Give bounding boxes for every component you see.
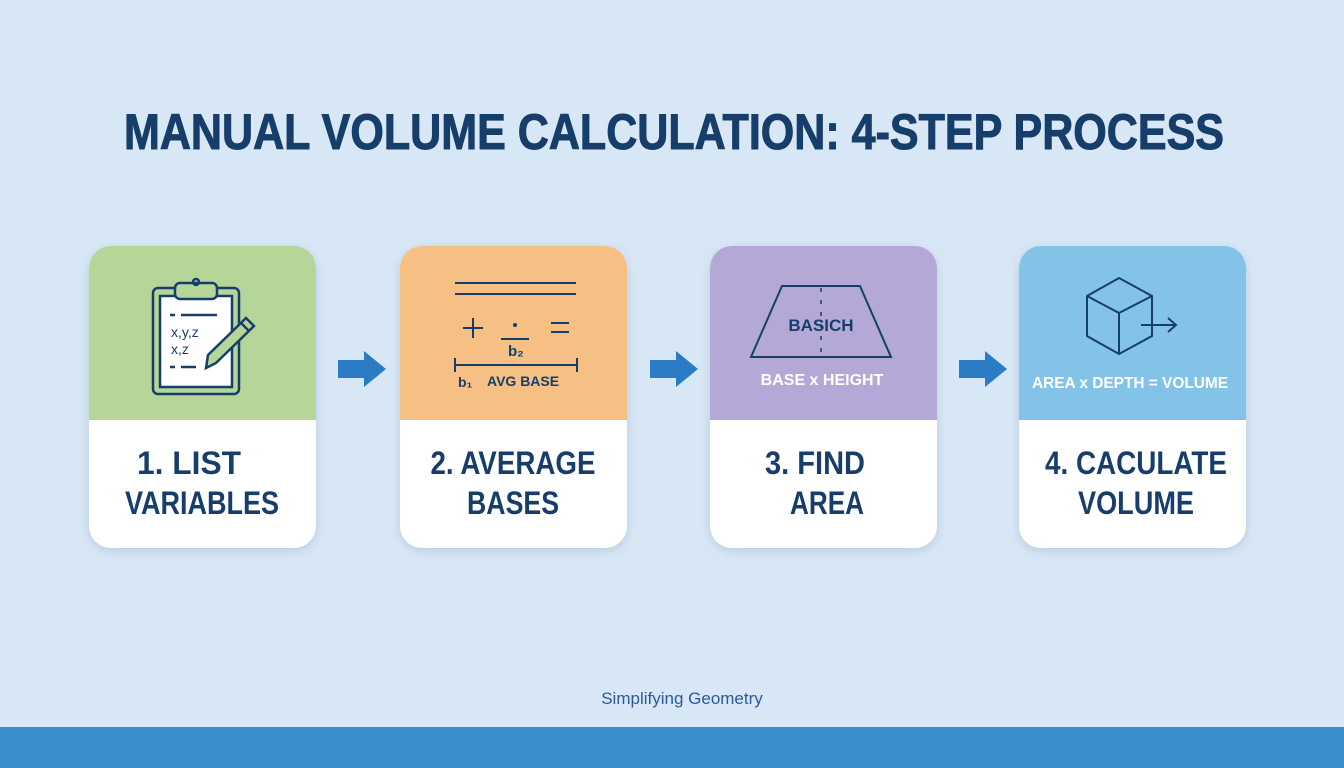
card 4: calculate volume: AREA x DEPTH = VOLUME bbox=[1032, 375, 1228, 392]
label 3: 3. FIND bbox=[765, 445, 865, 481]
card 2: average bases: b₁ bbox=[458, 374, 473, 390]
card 2: average bases bbox=[400, 246, 627, 548]
icon: trapezoid: BASICH bbox=[788, 316, 854, 335]
card 4: calculate volume bbox=[1019, 246, 1246, 548]
label 1: VARIABLES bbox=[125, 485, 279, 521]
label 4: VOLUME bbox=[1078, 485, 1194, 521]
footer bar bbox=[0, 727, 1344, 768]
card 2: average bases: b₂ bbox=[508, 343, 524, 360]
card 1: list variables: x,z bbox=[171, 341, 189, 357]
icon: trapezoid bbox=[751, 286, 891, 357]
label 2: BASES bbox=[467, 485, 559, 521]
icon: formula bbox=[455, 283, 577, 372]
label 3: AREA bbox=[790, 485, 864, 521]
label 1: 1. LIST bbox=[137, 445, 241, 481]
label 3 bbox=[765, 445, 865, 521]
icon: cube bbox=[1087, 278, 1176, 354]
arrow 1 bbox=[338, 351, 386, 387]
card 1: list variables bbox=[89, 246, 316, 548]
arrow 2 bbox=[650, 351, 698, 387]
card 3: find area bbox=[710, 246, 937, 548]
label 4: 4. CACULATE bbox=[1045, 445, 1227, 481]
label 2 bbox=[430, 445, 596, 521]
label 1 bbox=[125, 445, 279, 521]
card 2: average bases: AVG BASE bbox=[487, 373, 559, 389]
label 4 bbox=[1045, 445, 1227, 521]
card 3: find area: BASE x HEIGHT bbox=[761, 372, 884, 389]
footer text: Simplifying Geometry bbox=[601, 689, 763, 708]
card 1: list variables: x,y,z bbox=[171, 324, 199, 340]
label 2: 2. AVERAGE bbox=[430, 445, 596, 481]
icon: clipboard bbox=[153, 279, 254, 394]
arrow 3 bbox=[959, 351, 1007, 387]
